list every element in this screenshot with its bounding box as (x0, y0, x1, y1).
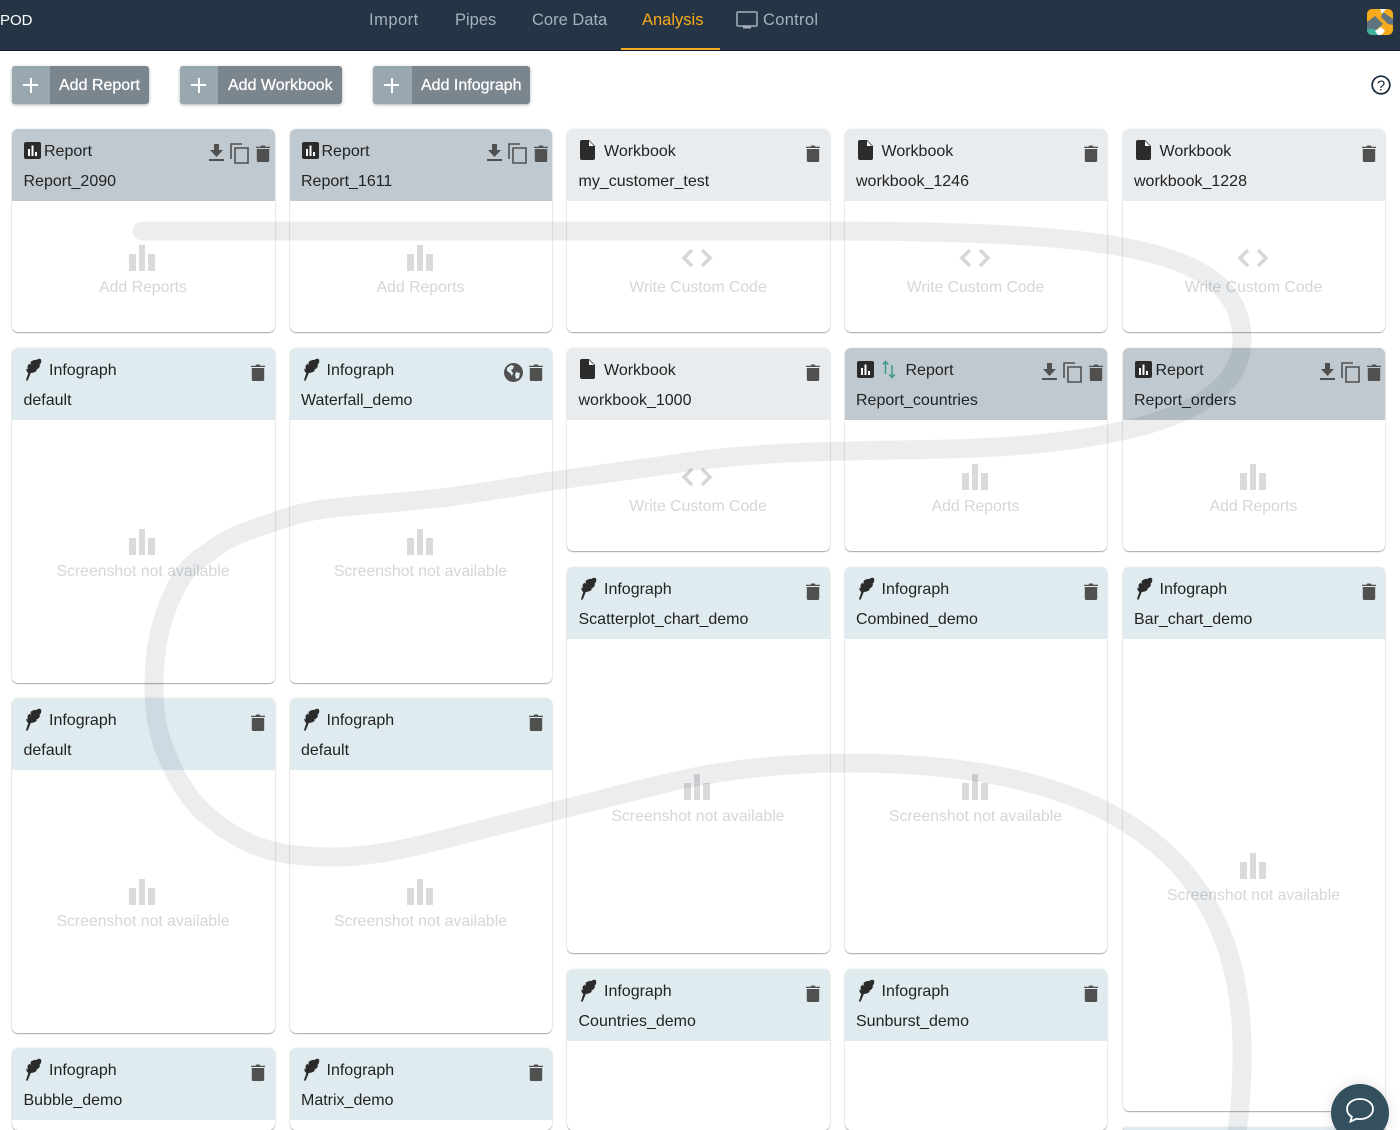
card: Report_2090 (12, 129, 274, 332)
card: Report_1611: Report (322, 142, 370, 160)
nav item: Core Data: Core Data (532, 11, 607, 29)
brand name: POD (0, 12, 33, 29)
card: default infograph 2: Infograph (49, 712, 117, 728)
card: Scatterplot_chart_demo (567, 567, 830, 953)
chat button (1331, 1084, 1389, 1130)
card: my_customer_test: Write Custom Code (629, 278, 767, 296)
card: workbook_1246 (844, 129, 1107, 332)
icon: chat bubble (1346, 1098, 1374, 1124)
card: Combined_demo (844, 567, 1107, 953)
button: Add Infograph: Add Infograph (421, 77, 522, 94)
card: Waterfall_demo: Waterfall_demo (301, 392, 412, 408)
card: Waterfall_demo: Screenshot not available (334, 562, 507, 580)
card: Bar_chart_demo: Infograph (1160, 580, 1227, 598)
button: Add Workbook (180, 66, 342, 104)
card: default infograph 1 (12, 348, 274, 683)
button: Add Infograph (373, 66, 530, 104)
card: default infograph 3 (290, 698, 552, 1033)
card: cut-off card at bottom right (1122, 1127, 1385, 1130)
nav item: Import: Import (369, 11, 419, 29)
card: my_customer_test: my_customer_test (578, 172, 709, 190)
card: workbook_1246: workbook_1246 (856, 172, 969, 190)
card: default infograph 3: Infograph (326, 712, 394, 728)
card: Matrix_demo (290, 1048, 552, 1130)
card: Bubble_demo: Infograph (49, 1062, 117, 1078)
nav item: Pipes: Pipes (455, 11, 496, 29)
card: my_customer_test: Workbook (604, 142, 676, 160)
card: workbook_1000: Workbook (604, 362, 676, 378)
card: my_customer_test (567, 129, 830, 332)
card: default infograph 2 (12, 698, 274, 1033)
card: workbook_1246: Write Custom Code (907, 278, 1044, 296)
card: default infograph 2: default (24, 742, 72, 758)
nav item: Analysis active: Analysis (642, 11, 703, 29)
icon: monitor (736, 11, 758, 28)
nav item: Control: Control (763, 11, 818, 29)
card: Report_1611: Add Reports (377, 278, 464, 296)
card: Combined_demo: Combined_demo (856, 610, 978, 628)
card: workbook_1228: workbook_1228 (1134, 172, 1247, 190)
button: Add Report: Add Report (59, 77, 140, 94)
card: Report_countries: Add Reports (932, 498, 1019, 514)
card: Bar_chart_demo (1122, 567, 1385, 1111)
card: Report_2090: Report_2090 (24, 172, 116, 190)
card: Sunburst_demo: Sunburst_demo (856, 1012, 969, 1030)
card: Report_orders: Add Reports (1210, 498, 1297, 514)
card: Bar_chart_demo: Screenshot not available (1167, 886, 1340, 904)
card: Report_orders (1122, 348, 1385, 551)
card: Countries_demo (567, 969, 830, 1130)
card: workbook_1000 (567, 348, 830, 551)
card: workbook_1228 (1122, 129, 1385, 332)
card: Combined_demo: Infograph (882, 580, 949, 598)
card: workbook_1000: workbook_1000 (578, 392, 691, 408)
card: Sunburst_demo: Infograph (882, 982, 949, 1000)
card: Report_2090: Report (44, 142, 92, 160)
card: Report_1611: Report_1611 (301, 172, 392, 190)
card: Report_countries: Report (906, 362, 954, 378)
card: Report_countries: Report_countries (856, 392, 978, 408)
card: default infograph 3: Screenshot not available (334, 912, 507, 930)
card: default infograph 2: Screenshot not available (56, 912, 230, 930)
card: default infograph 1: default (24, 392, 72, 408)
card: default infograph 3: default (301, 742, 349, 758)
card: Countries_demo: Countries_demo (578, 1012, 696, 1030)
top navigation bar (0, 0, 1400, 51)
card: Bar_chart_demo: Bar_chart_demo (1134, 610, 1252, 628)
card: Report_1611 (290, 129, 552, 332)
card: Scatterplot_chart_demo: Screenshot not available (611, 808, 784, 824)
card: workbook_1228: Workbook (1160, 142, 1231, 160)
active tab underline (621, 48, 720, 50)
icon: help (1371, 75, 1391, 95)
card: Countries_demo: Infograph (604, 982, 672, 1000)
card: Combined_demo: Screenshot not available (889, 808, 1062, 824)
card: Bubble_demo: Bubble_demo (24, 1092, 122, 1108)
card: Sunburst_demo (844, 969, 1107, 1130)
card: workbook_1000: Write Custom Code (629, 498, 767, 514)
card: default infograph 1: Infograph (49, 362, 117, 378)
button: Add Report (12, 66, 149, 104)
card: Scatterplot_chart_demo: Infograph (604, 580, 672, 598)
card: Report_orders: Report (1156, 362, 1204, 378)
icon: user avatar (1367, 9, 1393, 35)
card: Report_2090: Add Reports (99, 278, 187, 296)
card: default infograph 1: Screenshot not available (56, 562, 230, 580)
card: Waterfall_demo (290, 348, 552, 683)
card: Waterfall_demo: Infograph (326, 362, 394, 378)
card: Matrix_demo: Matrix_demo (301, 1092, 393, 1108)
card: Report_orders: Report_orders (1134, 392, 1236, 408)
card: Scatterplot_chart_demo: Scatterplot_chart_demo (578, 610, 748, 628)
card: Matrix_demo: Infograph (326, 1062, 394, 1078)
icon: help: ? (1377, 78, 1385, 94)
card: workbook_1246: Workbook (882, 142, 953, 160)
card: Bubble_demo (12, 1048, 274, 1130)
button: Add Workbook: Add Workbook (228, 77, 333, 94)
card: Report_countries (844, 348, 1107, 551)
card: workbook_1228: Write Custom Code (1185, 278, 1322, 296)
